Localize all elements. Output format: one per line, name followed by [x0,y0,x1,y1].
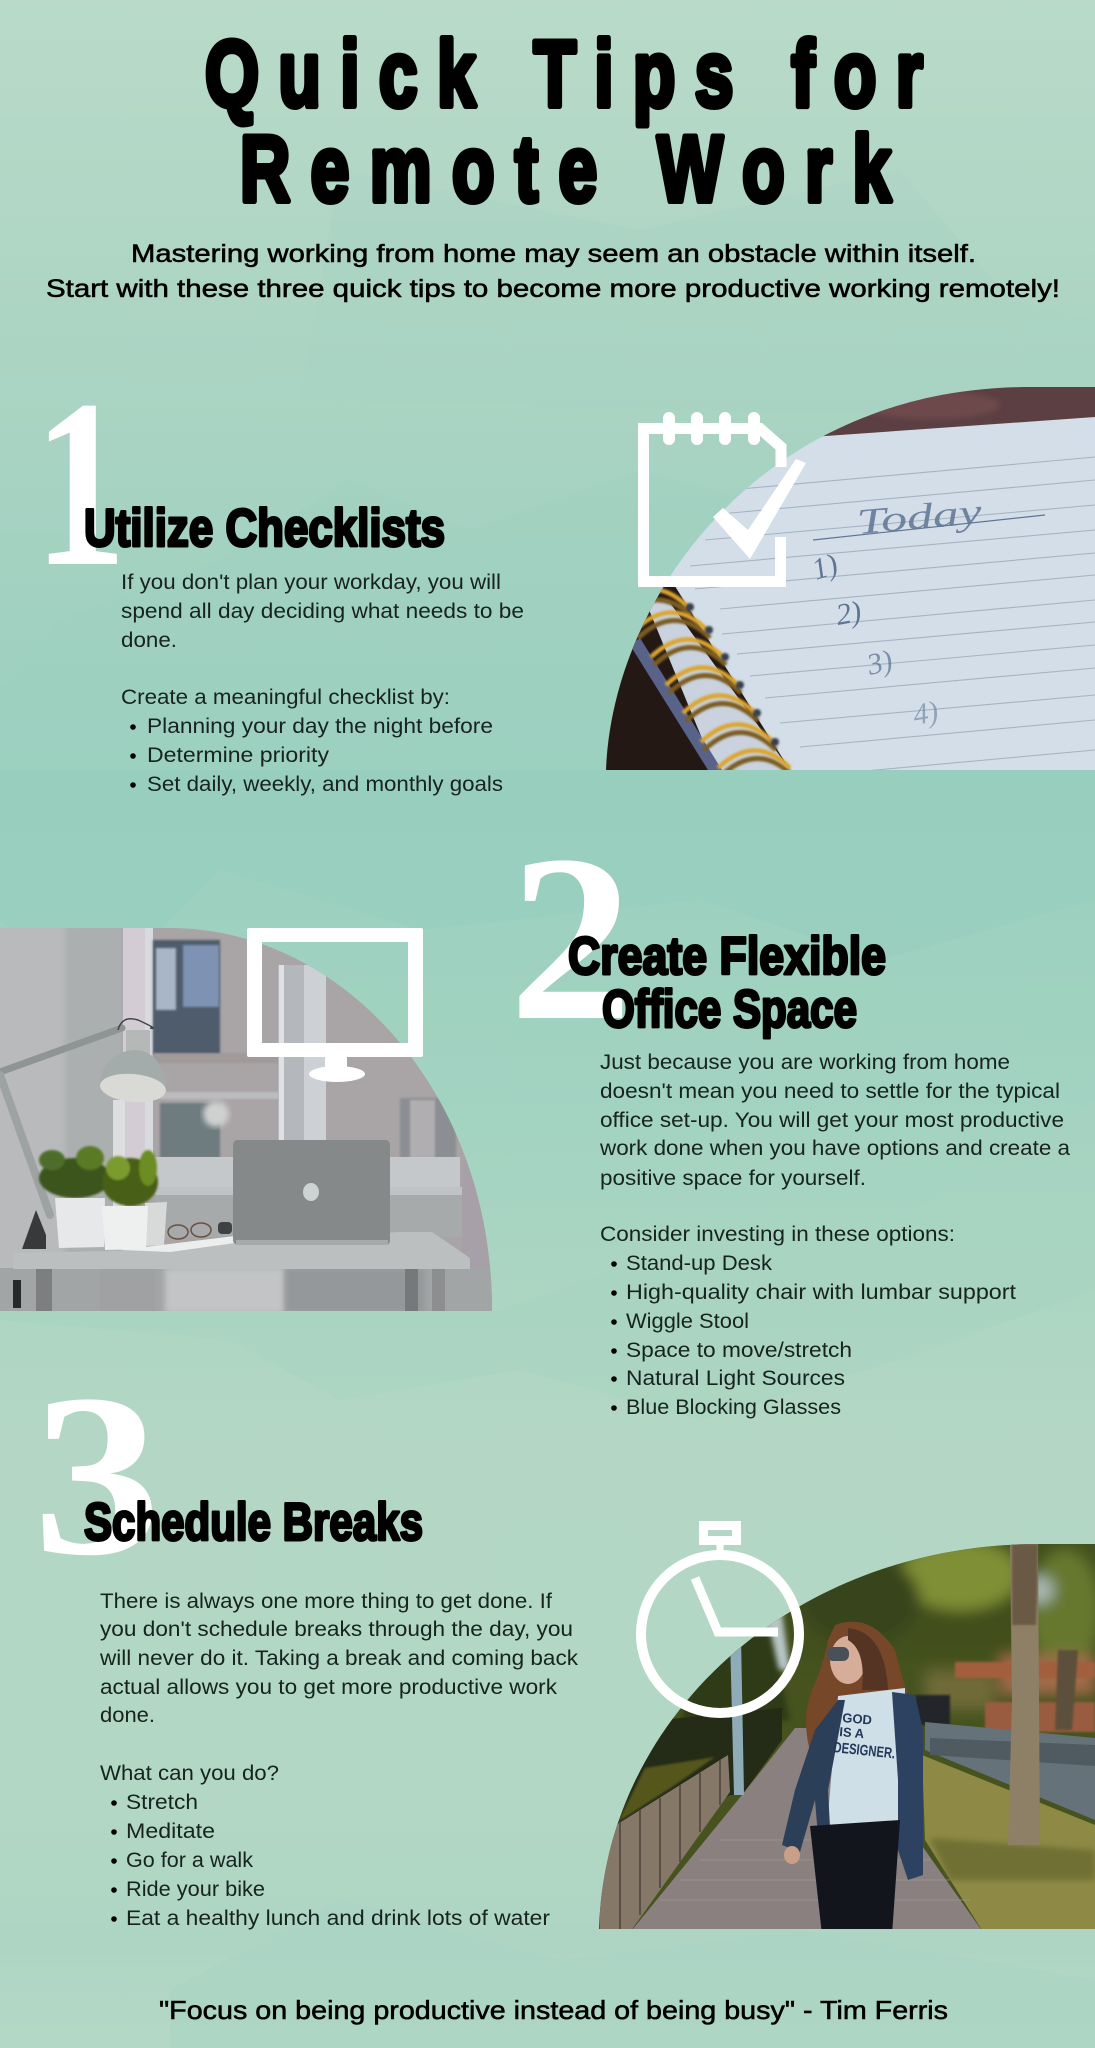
heading: create flexible office space: Office Space [602,980,857,1039]
text: tip 3 body: actual allows you to get more productive work [100,1676,558,1699]
shirt text: GOD [842,1710,873,1728]
text: tip 1 body: done. [121,629,177,652]
heading: create flexible office space: Create Flexible [568,927,886,986]
shirt text: IS A [839,1724,865,1741]
pole [730,1637,744,1795]
handwriting: list numbers: 4) [910,695,941,732]
text: tip 2 body: Consider investing in these options: [600,1223,955,1246]
quote: "Focus on being productive instead of being busy" - Tim Ferris [159,1995,948,2025]
glasses [168,1223,211,1239]
panel: tip 3 [42,1399,1095,1930]
text: tip 2 body: doesn't mean you need to settle for the typical [600,1080,1060,1103]
lamp [0,1028,122,1215]
icon: monitor [247,928,423,1082]
icon: stopwatch [641,1526,799,1713]
text: tip 3 body: There is always one more thing to get done. If [100,1590,552,1613]
text: tip 1 body: Create a meaningful checklist by: [121,686,450,709]
panel: tip 1 [34,351,1095,796]
text: tip 2 body: High-quality chair with lumbar support [626,1281,1016,1304]
plants [39,1146,158,1206]
text: tip 2 body: Natural Light Sources [626,1367,845,1390]
shirt text: DESIGNER. [833,1739,896,1762]
intro text: Mastering working from home may seem an obstacle within itself. [131,240,976,268]
heading: create flexible office space [568,927,886,1039]
text: tip 2 body: Just because you are working from home [600,1051,1010,1074]
photo: notebook checklist [600,380,1095,776]
handwriting: today: Today [855,491,983,542]
text: tip 1 body: Set daily, weekly, and monthly goals [147,773,503,796]
laptop [233,1140,390,1245]
text: tip 3 body: Go for a walk [126,1849,254,1872]
text: tip 3 body: Stretch [126,1791,198,1814]
text: tip 3 body: Ride your bike [126,1878,265,1901]
woman [806,1622,908,1748]
numeral 2: 2 [509,806,633,1070]
panel: tip 2 [0,806,1070,1419]
numeral 1: 1 [34,351,126,617]
handwriting: list numbers: 3) [863,644,896,682]
grass [922,1755,1095,1935]
text: tip 3 body: Eat a healthy lunch and drink lots of water [126,1907,550,1930]
text: tip 1 body: Planning your day the night before [147,715,493,738]
handwriting: list numbers: 1) [808,548,842,587]
text: tip 3 body: done. [100,1704,155,1727]
trunk [1008,1544,1040,1845]
handwriting: list numbers [814,554,937,729]
text: tip 1 body: spend all day deciding what needs to be [121,600,524,623]
text: tip 1 body: Determine priority [147,744,330,767]
road [925,1722,1095,1820]
text: tip 3 body: you don't schedule breaks through the day, you [100,1618,573,1641]
heading: schedule breaks: Schedule Breaks [84,1493,423,1552]
shirt text [834,1713,894,1758]
text: tip 3 body: What can you do? [100,1762,279,1785]
text: tip 2 body: Space to move/stretch [626,1339,852,1362]
title: Remote Work [240,116,892,221]
intro text: Start with these three quick tips to become more productive working remotely! [46,275,1060,303]
text: tip 3 body: Meditate [126,1820,215,1843]
text: tip 2 body: office set-up. You will get your most productive [600,1109,1064,1132]
pots [55,1198,105,1248]
fence [600,1755,730,1935]
intro text [46,240,1060,303]
text: tip 1 body [121,571,524,796]
icon: notepad with check [644,412,806,582]
text: tip 1 body: If you don't plan your workday, you will [121,571,501,594]
text: tip 2 body: Stand-up Desk [626,1252,773,1275]
text: tip 2 body: work done when you have options and create a [599,1137,1070,1160]
hedge [608,1708,782,1854]
text: tip 2 body: Wiggle Stool [626,1310,749,1333]
text: tip 3 body: will never do it. Taking a break and coming back [99,1647,579,1670]
photo: desk with laptop [0,925,497,1315]
handwriting: list numbers: 2) [833,595,864,632]
sidewalk [628,1728,985,1935]
title [205,21,923,221]
heading: utilize checklists: Utilize Checklists [84,499,445,558]
numeral 3: 3 [33,1347,161,1603]
photo: woman walking [595,1540,1095,1935]
text: tip 2 body: positive space for yourself. [600,1167,866,1190]
text: tip 2 body [599,1051,1070,1419]
title: Quick Tips for [205,21,923,126]
text: tip 2 body: Blue Blocking Glasses [626,1396,841,1419]
text: tip 3 body [99,1590,579,1930]
desk [13,1232,470,1269]
